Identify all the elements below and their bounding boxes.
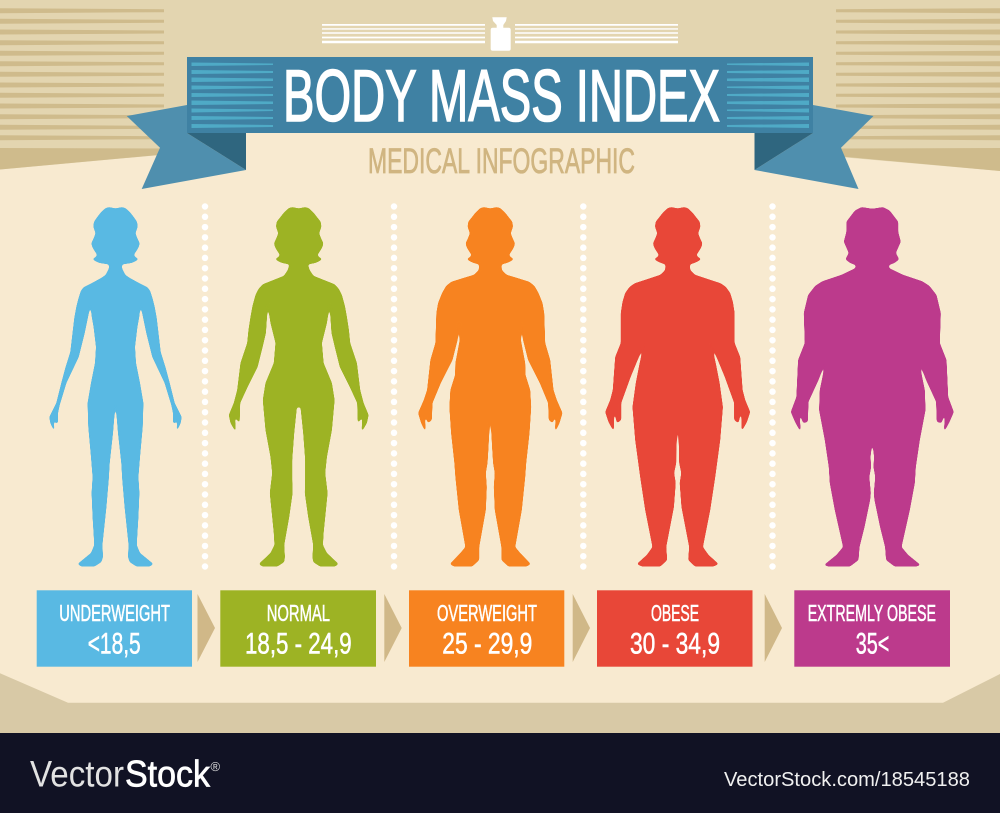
footer logo [30,754,220,795]
ribbon left stripes [192,62,273,128]
footer image id: VectorStock.com/18545188 [724,769,970,791]
arrow 4 [765,594,782,662]
bottom tan strip [0,673,1000,733]
category: obese [597,590,752,667]
category: overweight: 25 - 29,9 [442,627,532,660]
ribbon right stripes [727,62,809,128]
ribbon banner [127,56,873,189]
figure: extremely obese silhouette [791,207,954,566]
subtitle: MEDICAL INFOGRAPHIC [368,142,635,181]
figure: normal silhouette [229,207,368,566]
arrow 3 [573,594,590,662]
arrow 1 [198,594,215,662]
category: underweight: <18,5 [88,627,141,660]
title: BODY MASS INDEX [283,56,720,137]
top tan header panel [0,0,1000,171]
ribbon left tail [127,105,246,189]
footer bar [0,733,1000,813]
category: underweight: UNDERWEIGHT [59,600,170,626]
ribbon right fold [754,133,813,170]
category: overweight [409,590,564,667]
category: overweight: OVERWEIGHT [437,600,537,626]
icon: weight with decorative lines [322,17,678,51]
category: obese: 30 - 34,9 [630,627,720,660]
category: extremely obese: 35< [856,627,889,660]
footer logo: Stock [125,754,210,795]
ribbon left fold [187,133,246,170]
figure: underweight silhouette [50,207,182,566]
category: obese: OBESE [651,600,699,626]
figure: obese silhouette [605,207,750,566]
dotted dividers [205,206,772,567]
category: normal [220,590,376,667]
category: normal: NORMAL [267,600,330,626]
footer logo: ® [210,759,220,774]
arrow 2 [384,594,402,662]
ribbon right tail [754,105,874,189]
category: underweight [37,590,192,667]
category: extremely obese [794,590,950,667]
footer logo: Vector [30,754,124,795]
ribbon main band [187,57,813,133]
category: normal: 18,5 - 24,9 [245,627,352,660]
figure: overweight silhouette [418,207,562,566]
